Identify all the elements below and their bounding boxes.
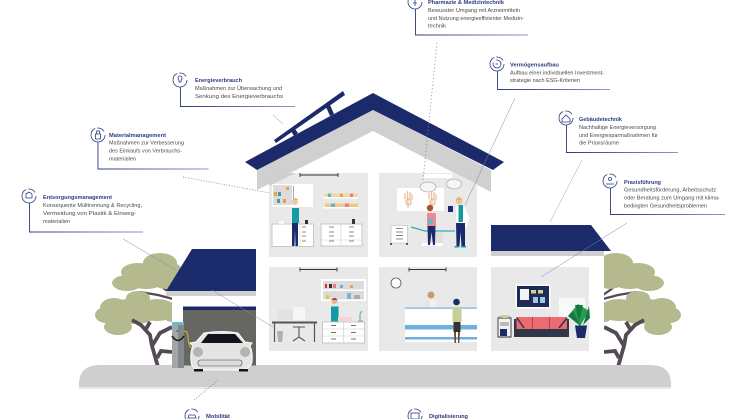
callout: Mobilität [185, 409, 230, 419]
lab cabinet [322, 322, 364, 343]
wall lettering [323, 194, 358, 208]
person: assistant [292, 198, 299, 246]
callout: Praxisführung: oder Beratung zum Umgang mit klima- [624, 196, 720, 202]
x-ray panel [397, 188, 444, 211]
callout: Entsorgungsmanagement [22, 189, 143, 232]
callout: Gebäudetechnik: Nachhaltige Energieversorgung [579, 125, 656, 131]
potted plant [568, 304, 590, 338]
callout: Praxisführung [603, 174, 725, 215]
charging cable [184, 331, 193, 349]
main roof [245, 93, 504, 170]
callout: Praxisführung: Praxisführung [624, 180, 662, 186]
room: waiting area [491, 267, 590, 351]
callout: Praxisführung: bedingten Gesundheitsproblemen [624, 204, 707, 210]
callout: Materialmanagement: materialien [109, 156, 136, 162]
callout: Vermögensaufbau [490, 57, 610, 90]
callout: Materialmanagement: Materialmanagement [109, 133, 166, 139]
callout: Vermögensaufbau: strategie nach ESG-Kriterien [510, 78, 580, 84]
ground [79, 365, 671, 389]
person: patient [427, 205, 436, 245]
room: examination [379, 173, 477, 257]
room: storage and lab [269, 173, 368, 257]
solar panel [274, 91, 345, 143]
gable soffit [257, 110, 491, 192]
hand images [405, 191, 436, 208]
callout: Entsorgungsmanagement: materialien [43, 219, 70, 225]
person: doctor [448, 197, 470, 248]
callout: Energieverbrauch: Energieverbrauch [195, 78, 243, 84]
sofa [514, 317, 569, 337]
microscope [358, 311, 363, 321]
ceiling light [300, 173, 338, 177]
shelf with supplies [321, 279, 366, 301]
callout: Gebäudetechnik: Gebäudetechnik [579, 117, 623, 123]
callout: Gebäudetechnik: die Praxisräume [579, 140, 619, 146]
wall shelf [272, 184, 313, 207]
wall clock [391, 278, 401, 288]
car [190, 332, 252, 372]
room: reception [379, 267, 477, 351]
left annex roof [166, 249, 256, 296]
connector lines [123, 43, 627, 400]
person: lab assistant [331, 298, 352, 322]
callout: Pharmazie & Medizintechnik [408, 0, 528, 36]
house walls [172, 130, 604, 367]
garage [183, 306, 256, 366]
callout: Energieverbrauch: Senkung des Energieverbrauchs [195, 94, 283, 100]
side table [498, 315, 511, 337]
left tree [95, 253, 184, 367]
callout: Digitalisierung [408, 409, 469, 419]
callout: Entsorgungsmanagement: Entsorgungsmanagement [43, 195, 112, 201]
room: office and lab desk [269, 267, 368, 351]
drawer cart [390, 226, 408, 245]
callout: Gebäudetechnik [559, 111, 678, 153]
callout: Materialmanagement: des Einkaufs von Verbrauchs- [109, 148, 182, 154]
callout: Energieverbrauch: Maßnahmen zur Überwachung und [195, 85, 282, 92]
desk with monitor and chair [272, 307, 317, 342]
cabinets [272, 219, 362, 246]
callout: Pharmazie & Medizintechnik: Bewusster Umgang mit Arzneimitteln [428, 8, 520, 14]
person: visitor [452, 299, 462, 343]
charging station [172, 322, 193, 368]
callout: Pharmazie & Medizintechnik: und Nutzung energieeffizienter Medizin- [428, 16, 524, 22]
pin board [516, 284, 550, 308]
callout: Energieverbrauch [173, 73, 295, 107]
right tree [592, 253, 681, 367]
callout: Materialmanagement [91, 128, 208, 170]
callout: Gebäudetechnik: und Energiesparmaßnahmen für [579, 133, 658, 139]
callout: Entsorgungsmanagement: Konsequente Mülltrennung & Recycling, [43, 203, 142, 209]
callout: Pharmazie & Medizintechnik: technik [428, 24, 446, 30]
callout: Materialmanagement: Maßnahmen zur Verbesserung [109, 140, 184, 146]
right annex roof [491, 225, 611, 256]
ceiling light [409, 268, 446, 272]
ceiling light [300, 268, 337, 272]
person: receptionist [420, 292, 436, 311]
exam table [411, 227, 455, 246]
surgical lamps [420, 174, 462, 192]
callout: Vermögensaufbau: Vermögensaufbau [510, 62, 560, 68]
callout: Pharmazie & Medizintechnik: Pharmazie & Medizintechnik [428, 0, 505, 6]
callout: Vermögensaufbau: Aufbau einer individuellen Investment- [510, 70, 604, 76]
radiator [559, 298, 585, 317]
callout: Praxisführung: Gesundheitsförderung, Arbeitsschutz [624, 188, 716, 194]
callout: Entsorgungsmanagement: Vermeidung von Plastik & Einweg- [43, 211, 136, 217]
reception desk [405, 308, 477, 342]
